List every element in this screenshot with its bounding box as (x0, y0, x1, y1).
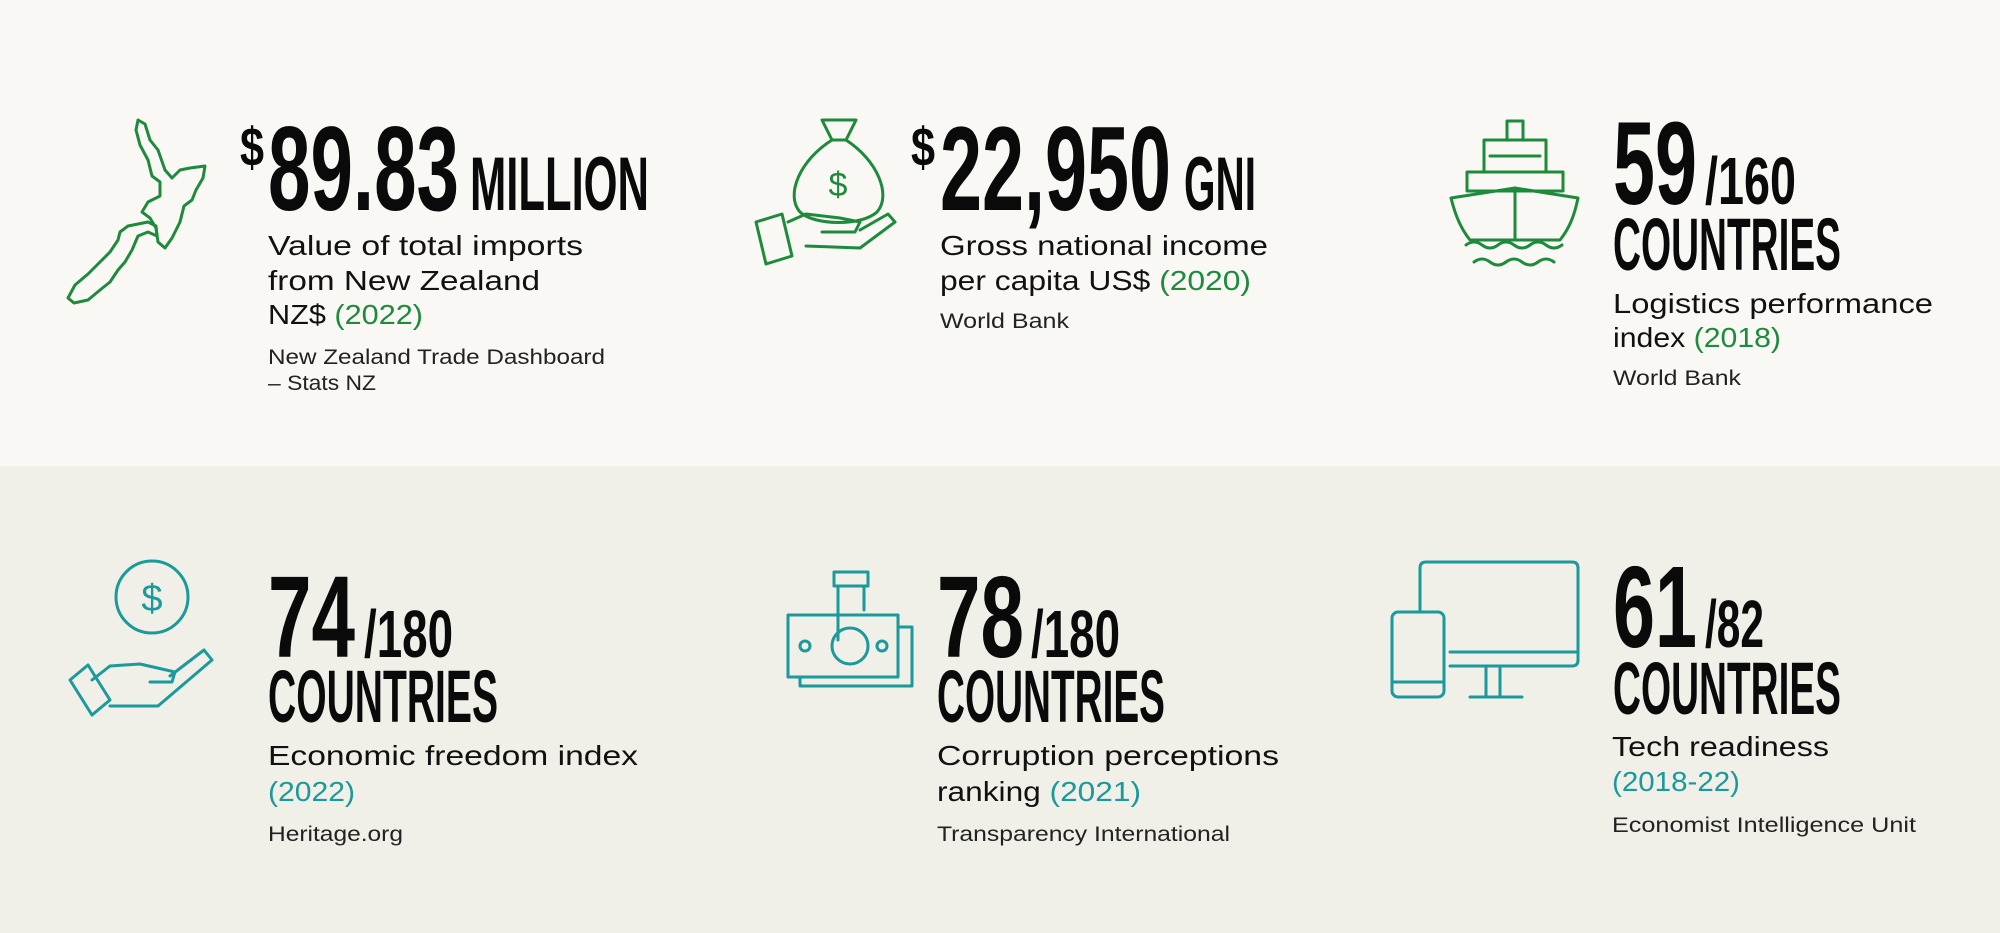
icon: hand with coin: $ (141, 578, 163, 620)
text: economic freedom description: (2022) (268, 776, 355, 807)
stat: 74/180 countries: /180 (364, 597, 453, 672)
panel: bottom background (0, 466, 2000, 933)
stat: 78/180 countries: /180 (1031, 597, 1120, 672)
text: GNI description (940, 230, 1268, 333)
text: economic freedom description: Heritage.org (268, 823, 403, 846)
stat: 61/82 countries (1613, 542, 1841, 730)
text: economic freedom description (268, 740, 638, 846)
stat: 89.83 million: $ (240, 116, 264, 178)
text: imports description (268, 230, 605, 395)
text: imports description: Value of total imports (268, 230, 583, 261)
text: tech readiness description: Tech readiness (1612, 731, 1829, 762)
panel: top background (0, 0, 2000, 466)
stat: 61/82 countries: /82 (1705, 587, 1764, 662)
text: tech readiness description (1612, 731, 1916, 837)
text: imports description: – Stats NZ (268, 372, 376, 395)
text: corruption description (937, 740, 1279, 846)
stat: 59/160 countries: 59 (1613, 98, 1697, 230)
text: corruption description: ranking (2021) (937, 776, 1141, 807)
text: imports description: New Zealand Trade Dashboard (268, 346, 605, 369)
icon: cash hand (788, 572, 912, 686)
stat: 78/180 countries (937, 552, 1165, 738)
text: logistics description: Logistics performance (1613, 288, 1933, 319)
stat: 22,950 GNI: GNI (1184, 142, 1256, 227)
stat: 89.83 million: 89.83 (268, 102, 459, 236)
stat: 78/180 countries: COUNTRIES (937, 655, 1165, 738)
text: GNI description: World Bank (940, 310, 1070, 333)
icon: ship (1451, 121, 1578, 265)
stat: 61/82 countries: 61 (1613, 542, 1697, 672)
icon: computer and phone (1392, 562, 1578, 697)
icon: money bag in hand (756, 120, 895, 264)
text: logistics description (1613, 288, 1933, 390)
stat: 78/180 countries: 78 (937, 552, 1024, 682)
text: imports description: NZ$ (2022) (268, 299, 423, 330)
text: imports description: from New Zealand (268, 265, 540, 296)
stat: 22,950 GNI: $ (911, 116, 935, 178)
text: corruption description: Transparency International (937, 823, 1230, 846)
stat: 59/160 countries: /160 (1705, 144, 1796, 219)
text: logistics description: World Bank (1613, 367, 1742, 390)
stat: 59/160 countries (1613, 98, 1841, 286)
stat: 22,950 GNI: 22,950 (940, 102, 1171, 236)
stat: 74/180 countries: COUNTRIES (268, 655, 498, 738)
text: tech readiness description: (2018-22) (1612, 766, 1740, 797)
text: GNI description: per capita US$ (2020) (940, 265, 1251, 296)
stat: 74/180 countries (268, 552, 498, 738)
stat: 74/180 countries: 74 (268, 552, 355, 682)
text: logistics description: index (2018) (1613, 322, 1781, 353)
text: tech readiness description: Economist Intelligence Unit (1612, 814, 1916, 837)
text: GNI description: Gross national income (940, 230, 1268, 261)
icon: New Zealand map (68, 120, 205, 303)
icon: money bag in hand: $ (829, 166, 848, 204)
text: corruption description: Corruption perceptions (937, 740, 1279, 771)
stat: 89.83 million: MILLION (470, 142, 649, 227)
text: economic freedom description: Economic freedom index (268, 740, 638, 771)
icon: hand with coin (70, 561, 212, 715)
